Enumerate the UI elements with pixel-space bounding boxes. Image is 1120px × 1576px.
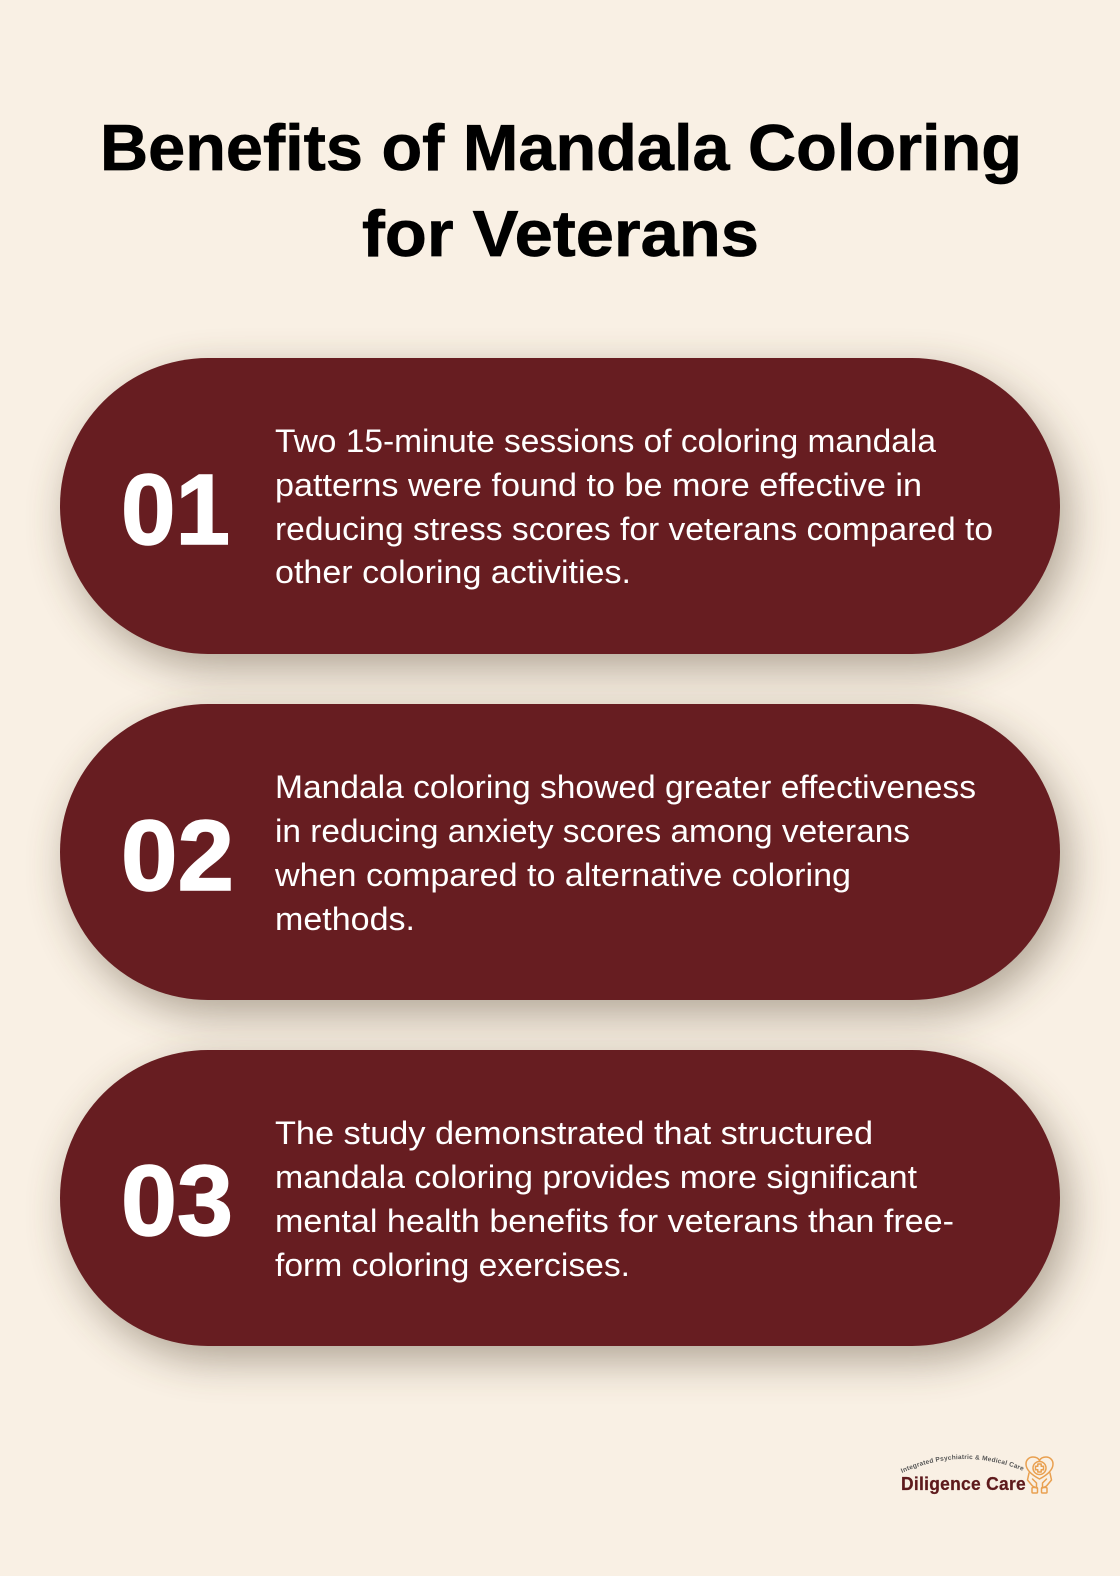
text: benefit 01: Two 15-minute sessions of coloring mandala <box>275 423 936 459</box>
logo tagline: Integrated Psychiatric & Medical Care <box>900 1454 1024 1473</box>
logo wordmark: Diligence Care <box>901 1474 1026 1494</box>
text: benefit 02: in reducing anxiety scores among veterans <box>275 813 910 849</box>
number 03: 03 <box>121 1145 233 1257</box>
number 01: 01 <box>121 454 230 566</box>
text: benefit 01: other coloring activities. <box>275 554 631 590</box>
number 02: 02 <box>121 800 234 912</box>
panel: benefit 01 <box>60 358 1068 668</box>
icon: heart in caring hands <box>1026 1457 1053 1493</box>
text: benefit 03 <box>275 1115 954 1283</box>
text: benefit 02: methods. <box>275 901 415 937</box>
panel: benefit 02 <box>60 704 1068 1014</box>
panel: benefit 03 <box>60 1050 1068 1360</box>
text: benefit 02 <box>274 769 976 937</box>
title: for Veterans <box>362 197 759 270</box>
text: benefit 03: mental health benefits for veterans than free- <box>275 1203 954 1239</box>
text: benefit 01: patterns were found to be more effective in <box>275 467 922 503</box>
logo: Diligence Care <box>900 1454 1054 1494</box>
text: benefit 01: reducing stress scores for veterans compared to <box>275 511 993 547</box>
text: benefit 02: when compared to alternative coloring <box>274 857 851 893</box>
text: benefit 03: The study demonstrated that structured <box>275 1115 873 1151</box>
text: benefit 03: mandala coloring provides more significant <box>275 1159 917 1195</box>
text: benefit 02: Mandala coloring showed greater effectiveness <box>275 769 976 805</box>
text: benefit 01 <box>275 423 993 590</box>
text: benefit 03: form coloring exercises. <box>275 1247 630 1283</box>
title <box>100 111 1022 270</box>
title: Benefits of Mandala Coloring <box>100 111 1022 184</box>
